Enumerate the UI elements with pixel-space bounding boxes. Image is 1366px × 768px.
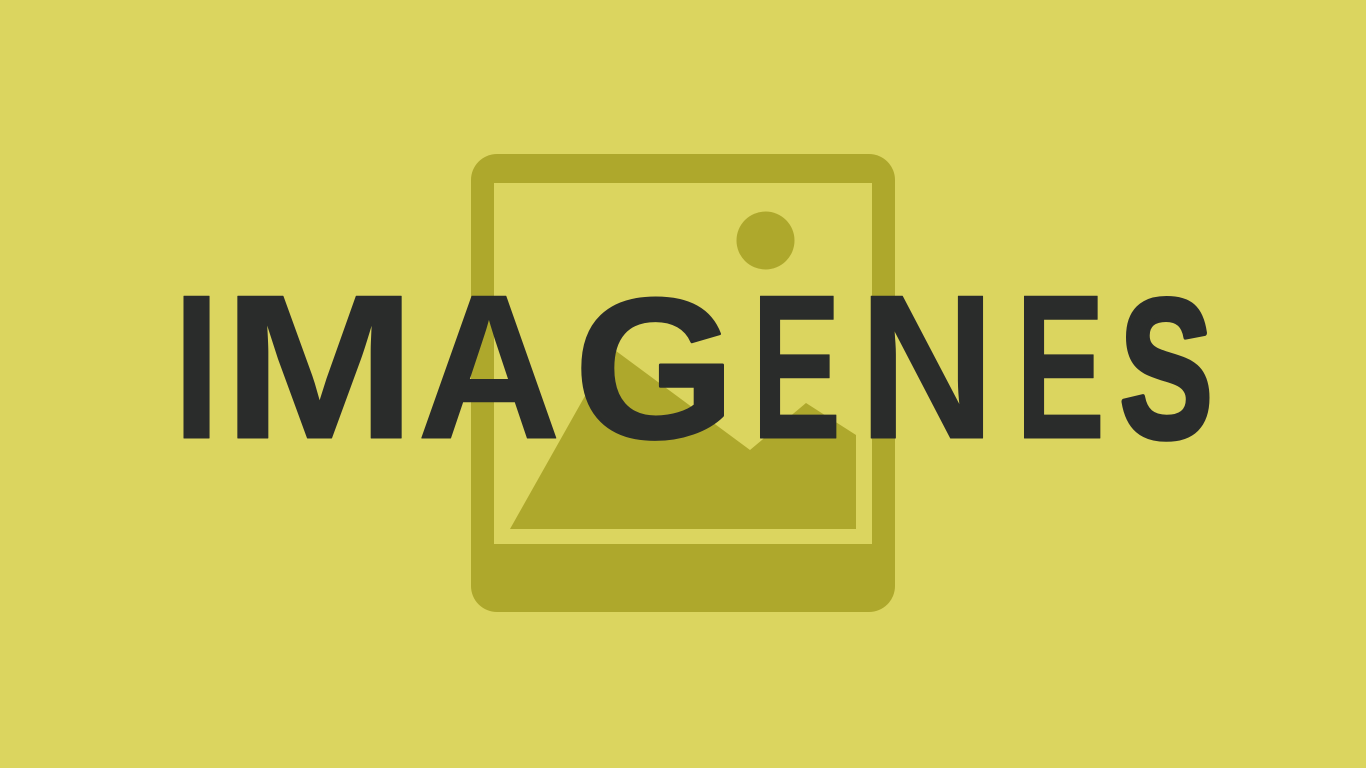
title: IMAGENES [172,251,1213,483]
title: IMAGENES: A [417,252,561,483]
title: IMAGENES: E [751,251,841,482]
title: IMAGENES: S [1120,259,1213,480]
title: IMAGENES: M [222,252,417,482]
title: IMAGENES: G [574,258,735,481]
title: IMAGENES: E [1015,251,1105,482]
title: IMAGENES: I [172,252,221,482]
icon: picture placeholder [471,154,895,612]
title: IMAGENES: N [858,252,995,482]
